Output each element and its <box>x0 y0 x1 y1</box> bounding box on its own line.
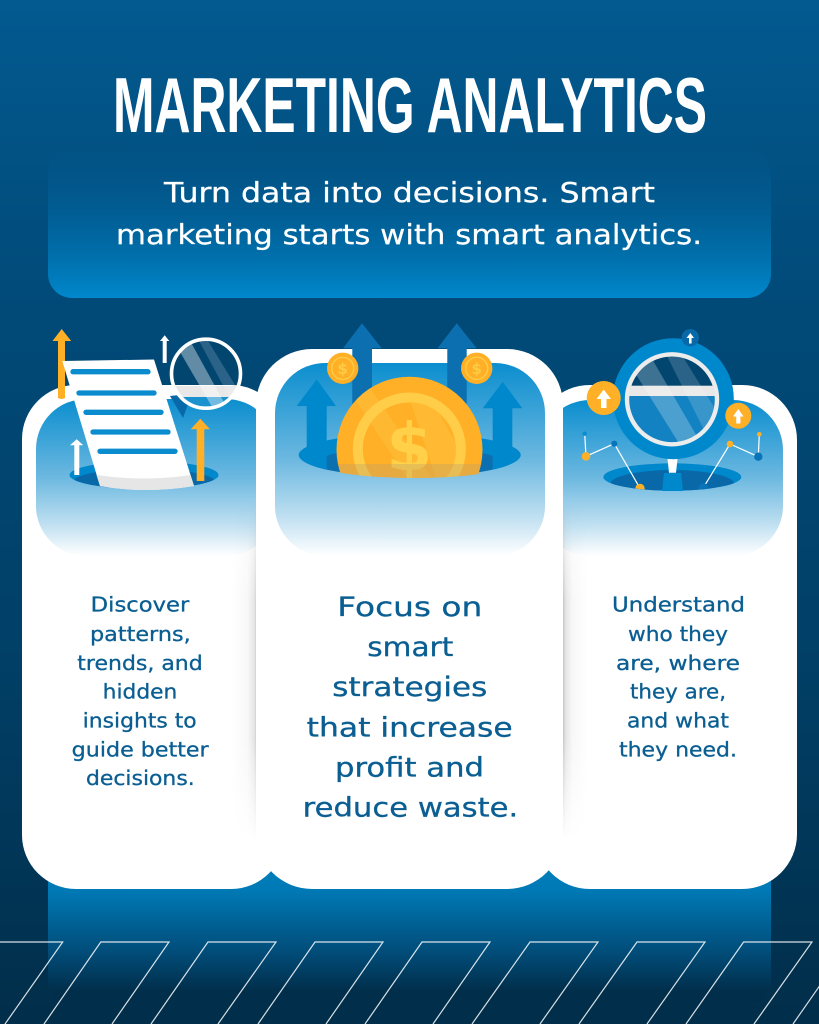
hole <box>70 464 218 488</box>
icon: small coin left: $ <box>337 360 348 378</box>
icon: small coin left <box>327 353 358 384</box>
icon: left orange badge <box>587 381 621 415</box>
icon: orange arrow right <box>191 419 210 481</box>
center card gradient header <box>275 363 545 556</box>
icon: magnifier stem <box>668 459 678 473</box>
icon: magnifier lens <box>170 336 243 412</box>
subtitle text: marketing starts with smart analytics. <box>116 218 702 251</box>
icon: magnifier with data network <box>582 329 762 498</box>
text: right card <box>612 593 745 762</box>
text: left card <box>72 593 210 790</box>
icon: gold coin with growth arrows <box>296 323 522 478</box>
text: left card: trends, and <box>77 651 203 675</box>
icon: big coin <box>336 376 482 478</box>
icon: document <box>62 360 194 490</box>
left card gradient header <box>36 399 276 556</box>
text: right card: who they <box>628 622 728 646</box>
text: center card: that increase <box>307 713 513 744</box>
icon: small coin right <box>461 353 492 384</box>
panel: lower band <box>48 840 771 1005</box>
icon: magnifier body <box>613 338 734 459</box>
icon: magnifier lens <box>625 352 725 446</box>
icon: white arrow small bottom <box>70 439 83 475</box>
text: right card: they need. <box>619 738 737 762</box>
panel: subtitle band <box>48 150 771 298</box>
text: center card: Focus on <box>337 592 482 623</box>
network lines and nodes <box>582 432 762 493</box>
hole <box>299 433 521 477</box>
text: left card: patterns, <box>90 622 191 646</box>
text: center card: strategies <box>332 672 487 703</box>
text: left card: guide better <box>72 738 210 762</box>
text: left card: hidden <box>103 680 177 704</box>
text: left card: decisions. <box>86 766 195 790</box>
text: left card: Discover <box>91 593 190 617</box>
icon: orange arrow tall <box>52 329 71 399</box>
front arrows <box>297 379 522 455</box>
right card gradient header <box>540 400 783 556</box>
panel: right card <box>535 385 797 889</box>
text: right card: and what <box>627 709 729 733</box>
icon: small coin right: $ <box>471 360 482 378</box>
text: right card: are, where <box>616 651 740 675</box>
text: center card: reduce waste. <box>303 793 518 824</box>
text: center card <box>303 592 518 824</box>
panel: center card <box>256 349 563 889</box>
icon: magnifier handle <box>170 395 189 418</box>
icon: top badge <box>682 329 699 346</box>
text: center card: smart <box>367 632 453 663</box>
hole inner shade <box>306 453 513 472</box>
diagonal line pattern <box>0 942 819 1024</box>
text: center card: profit and <box>335 753 484 784</box>
icon: right orange badge <box>725 403 751 429</box>
text: right card: Understand <box>612 593 745 617</box>
subtitle text: Turn data into decisions. Smart <box>163 176 655 209</box>
text: left card: insights to <box>83 709 197 733</box>
icon: big coin: $ <box>386 409 432 486</box>
back arrows <box>343 323 477 415</box>
panel: left card <box>22 385 285 889</box>
hole <box>603 463 742 491</box>
center card shadows <box>248 516 572 824</box>
text: right card: they are, <box>630 680 726 704</box>
icon: document with magnifier and arrows <box>52 329 243 493</box>
icon: white arrow small top <box>160 335 169 363</box>
subtitle text <box>116 176 702 251</box>
